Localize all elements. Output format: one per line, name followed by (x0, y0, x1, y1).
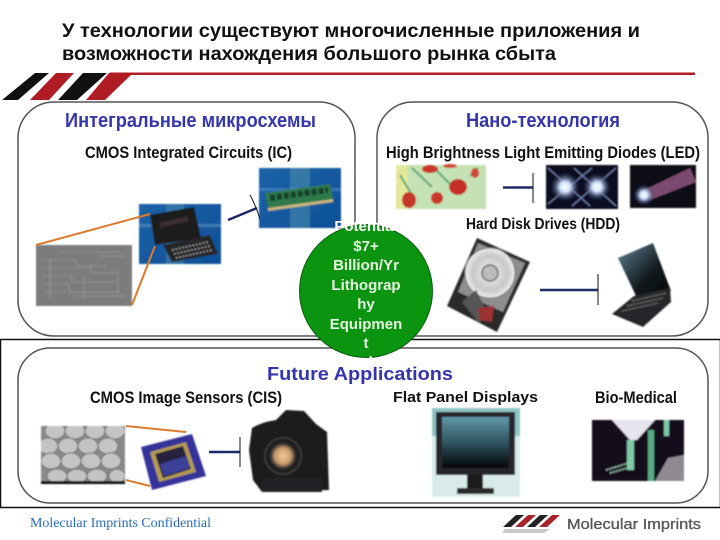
header stripe logo and red rule (2, 72, 695, 100)
image: memory chips (139, 204, 221, 264)
callout: market potential circle: hy (357, 296, 375, 313)
image: bio-medical pipettes (592, 420, 684, 481)
callout: market potential circle: $7+ (353, 238, 379, 255)
arrow: LED to lamps (503, 173, 533, 203)
image: image sensor chip (141, 434, 206, 490)
callout: market potential circle: Potential (334, 218, 398, 235)
callout: market potential circle: Equipmen (330, 316, 402, 333)
image: memory module (259, 168, 341, 228)
image: camera (249, 410, 329, 492)
subheading: bio-medical: Bio-Medical (595, 389, 677, 407)
footer logo: Molecular Imprints (502, 515, 701, 533)
callout: market potential circle: Market (342, 354, 390, 371)
callout: market potential circle: t (364, 335, 368, 352)
heading: future applications: Future Applications (267, 364, 453, 384)
connector lines: orange zoom (36, 214, 155, 305)
title: У технологии существуют многочисленные приложения и (62, 20, 640, 42)
arrow: chip to module (228, 195, 260, 220)
connector lines: orange zoom (126, 426, 186, 486)
subheading: CMOS IC: CMOS Integrated Circuits (IC) (85, 143, 292, 162)
image: flashlight (630, 165, 696, 208)
panel: nano technology (377, 102, 708, 336)
subheading: flat panel displays: Flat Panel Displays (393, 390, 538, 406)
title (62, 20, 640, 65)
heading: integrated circuits: Интегральные микросхемы (65, 110, 316, 132)
arrow: HDD to laptop (540, 274, 598, 305)
arrow: sensor to camera (209, 437, 240, 467)
image: bright lamps (546, 165, 618, 209)
callout: market potential circle (300, 218, 432, 371)
title: возможности нахождения большого рынка сбыта (62, 43, 556, 65)
footer: confidentiality note: Molecular Imprints Confidential (30, 516, 211, 531)
panel: future applications (18, 348, 708, 503)
image: red LEDs (396, 164, 486, 209)
panel: integrated circuits (18, 102, 355, 336)
callout: market potential circle: Lithograp (331, 277, 401, 294)
callout: market potential circle: Billion/Yr (333, 257, 399, 274)
image: microlens array (38, 423, 125, 484)
subheading: HDD: Hard Disk Drives (HDD) (466, 216, 620, 233)
image: laptop (612, 243, 671, 327)
footer logo: Molecular Imprints: Molecular Imprints (567, 516, 701, 533)
outer box: future applications frame (0, 340, 720, 508)
image: hard disk (447, 238, 530, 332)
image: circuit layout (36, 245, 132, 306)
subheading: CIS: CMOS Image Sensors (CIS) (90, 388, 282, 407)
image: monitor (432, 408, 520, 497)
heading: nano technology: Нано-технология (466, 110, 620, 132)
